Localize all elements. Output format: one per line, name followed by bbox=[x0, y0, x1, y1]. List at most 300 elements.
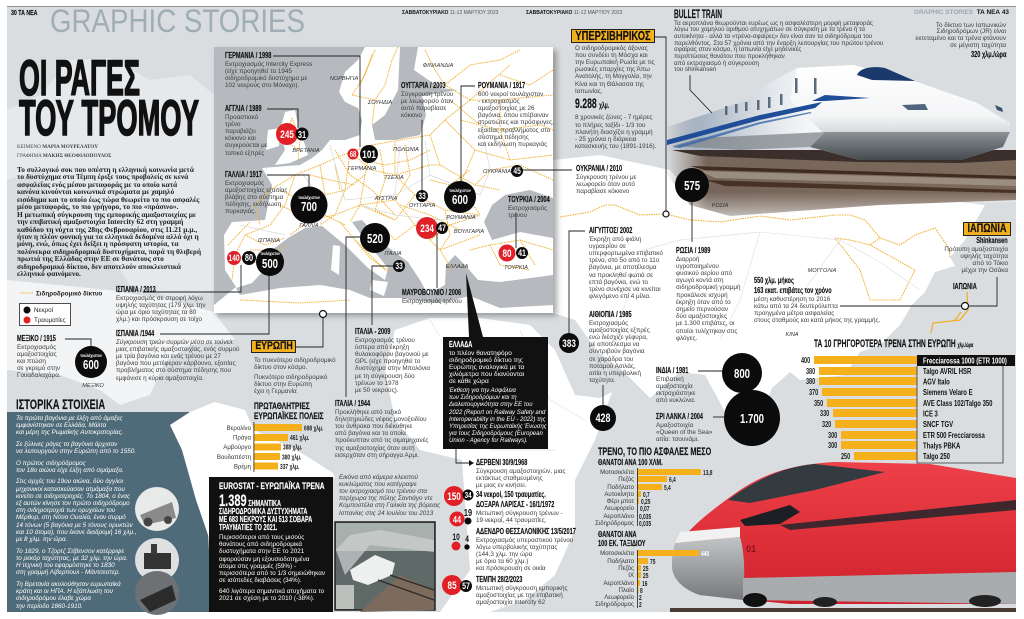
text: Άδενδρο Θεσσαλονίκης bbox=[476, 527, 576, 572]
text: history: Ο πρώτος σιδηρόδρομος bbox=[16, 460, 86, 467]
main title: ΟΙ ΡΑΓΕΣ bbox=[19, 50, 140, 106]
intro paragraph: σιδηροδρομικό δίκτυο, δεν αποτελούν αποκλειστικά bbox=[17, 262, 181, 271]
text: Μαυροβούνιο 2006: Εκτροχιασμός τρένου bbox=[402, 298, 462, 304]
casualty circles: 101 bbox=[362, 149, 376, 161]
text: Ουγγαρία 2003: με λεωφορείο όταν bbox=[401, 98, 453, 105]
bar chart: european cities: Βερολίνο bbox=[227, 425, 252, 432]
text: JR network: Σιδηροδρόμων (JR) είναι bbox=[937, 28, 1006, 35]
text: history: στη σιδηροτροχιά των ορυχείων του bbox=[16, 507, 115, 514]
text: Bullet train: Τα αεροπλάνα θεωρούνται ευρέως ως η ασφαλέστερη μορφή μεταφοράς bbox=[674, 20, 873, 26]
text: history bbox=[16, 414, 137, 610]
intro paragraph bbox=[17, 165, 201, 278]
text: Ισπανία 2013: χλμ.) και πρόσκρουση σε τοίχο bbox=[116, 316, 202, 323]
text: Ιταλία 2009 bbox=[355, 327, 430, 394]
bar chart: deaths per 100 km: Αυτοκίνητο bbox=[604, 491, 635, 498]
europe map country names: ΠΟΛΩΝΙΑ bbox=[393, 147, 419, 153]
text: Αιθιοπία 1985: ενώ διέσχιζε γέφυρα, bbox=[589, 334, 648, 341]
text: Γαλλία 1917: Εκτροχιασμός bbox=[225, 180, 264, 186]
text: history: Το 1829, ο Τζορτζ Στίβενσον κατέρριψε bbox=[16, 548, 124, 555]
masthead: graphic stories: GRAPHIC STORIES bbox=[50, 3, 305, 39]
legend: Τραυματίες bbox=[34, 316, 66, 324]
text: Μαυροβούνιο 2006: ΜΑΥΡΟΒΟΥΝΙΟ / 2006 bbox=[402, 288, 461, 297]
photo: red frecciarossa train bbox=[670, 462, 1016, 612]
text: Ρωσία 1989: Διαρροή bbox=[676, 256, 699, 262]
text: Αιθιοπία 1985 bbox=[589, 310, 650, 384]
ring markers bbox=[320, 211, 968, 318]
text: Ρουμανία 1917: - εκτροχιασμός bbox=[478, 98, 520, 105]
text: Ρωσία 1989: οποίοι τυλίχτηκαν στις bbox=[676, 328, 737, 335]
text: Ρουμανία 1917: αμαξοστοιχίας με 26 bbox=[478, 105, 535, 112]
byline: ΓΡΑΦΗΜΑ ΜΑΚΗΣ ΘΕΟΦΙΛΟΠΟΥΛΟΣ bbox=[17, 153, 111, 159]
text: Υπερσιβηρικός: που συνδέει τη Μόσχα και bbox=[575, 52, 648, 59]
europe map country names: ΑΥΣΤΡΙΑ bbox=[374, 196, 398, 202]
text: Ουκρανία 2010: ΟΥΚΡΑΝΙΑ / 2010 bbox=[576, 164, 622, 173]
text: JR network: σε μέγιστη ταχύτητα bbox=[950, 42, 1006, 49]
masthead date centre right: ΣΑΒΒΑΤΟΚΥΡΙΑΚΟ 11-12 ΜΑΡΤΙΟΥ 2023 bbox=[526, 10, 622, 16]
text: history: κράτη και οι ΗΠΑ. Η εξάπλωση του bbox=[16, 588, 113, 595]
text: Ισπανία 2013: Εκτροχιασμός σε στροφή λόγω bbox=[116, 294, 203, 302]
text: eurostat panel: EUROSTAT - ΕΥΡΩΠΑΪΚΑ ΤΡΕΝΑ bbox=[219, 481, 325, 492]
text: Αίγυπτος 2002: φλεγόμενο επί 4 μίλια. bbox=[589, 293, 651, 300]
masthead date centre left: ΣΑΒΒΑΤΟΚΥΡΙΑΚΟ 11-12 ΜΑΡΤΙΟΥ 2023 bbox=[402, 10, 498, 16]
text: greece panel: Interoperability in the EU - 2022) της bbox=[449, 417, 546, 423]
text: Υπερσιβηρικός: το πλήρες ταξίδι - 1/3 του bbox=[575, 122, 645, 129]
text: eurostat panel: 640 λιγότερα σημαντικά ατυχήματα το bbox=[219, 588, 324, 595]
text: Μαυροβούνιο 2006 bbox=[402, 288, 462, 304]
text: eurostat panel: δυστυχήματα στην ΕΕ το 2021 bbox=[219, 548, 304, 555]
text: history: Η τεχνική του εφαρμόστηκε το 1830 bbox=[16, 562, 115, 569]
world map labels bbox=[82, 203, 837, 389]
casualty circles bbox=[75, 123, 780, 595]
panel: europe map bbox=[214, 47, 553, 313]
land: africa bbox=[385, 318, 612, 612]
text: Ουκρανία 2010 bbox=[576, 164, 636, 195]
text: Άδενδρο Θεσσαλονίκης: λόγω υπερβολικής ταχύτητας bbox=[476, 544, 557, 551]
text: history: εξ αυτών κίνησε τον πρώτο σιδηρόδρομο bbox=[16, 500, 130, 507]
africa borders bbox=[430, 320, 585, 610]
text: Γαλλία 1917 bbox=[225, 170, 288, 215]
legend bbox=[20, 290, 103, 326]
text: greece panel: για τους Σιδηροδρόμους (European bbox=[449, 431, 543, 437]
text: Τέμπη: αμαξοστοιχία Intercity 62 bbox=[476, 599, 545, 606]
bar chart: deaths per 100m journeys: Αεροπλάνο bbox=[603, 580, 635, 587]
text: Δοξαρά Λάρισας: Μετωπική σύγκρουση τρένων - bbox=[476, 510, 563, 516]
eurostat black panel bbox=[209, 477, 333, 612]
text: history: και μέρη της Ρωμαϊκής Αυτοκρατορίας. bbox=[16, 429, 123, 436]
text: eurostat panel: περισσότερα από το 1/3 σημειώθηκαν bbox=[219, 570, 325, 577]
text: Σρι Λάνκα 2004: ΣΡΙ ΛΑΝΚΑ / 2004 bbox=[656, 412, 703, 421]
text: eurostat panel: άτομα στις γραμμές (59%) - bbox=[219, 563, 296, 570]
text: JR network bbox=[916, 22, 1006, 59]
text: Ουκρανία 2010: παραβίασε κόκκινο bbox=[576, 188, 629, 195]
text: Ρουμανία 1917: σύστημα πέδησης bbox=[478, 134, 529, 141]
casualty circles: 47 bbox=[438, 222, 446, 233]
photo caption bbox=[339, 474, 440, 517]
europe map country names: ΤΟΥΡΚΙΑ bbox=[504, 265, 528, 271]
bar chart: deaths per 100m journeys: 16 bbox=[642, 580, 648, 588]
casualty circles: 150 bbox=[447, 491, 461, 503]
bar chart: deaths per 100m journeys: Πλοίο bbox=[618, 587, 635, 594]
casualty circles: 520 bbox=[367, 233, 383, 246]
intro paragraph: καθόδου τη νύχτα της 28ης Φεβρουαρίου, στις 11.21 μ.μ., bbox=[17, 224, 197, 234]
heading: european cities bbox=[254, 401, 324, 422]
text: history: με 8 χλμ. την ώρα. bbox=[16, 536, 67, 543]
text: Αιθιοπία 1985: αμαξοστοιχίας εξπρές bbox=[589, 327, 650, 334]
text: greece panel: Union - Agency for Railways). bbox=[449, 438, 528, 444]
text: JR network: Το δίκτυο των Ιαπωνικών bbox=[936, 22, 1006, 28]
intro paragraph: μόνη, ενώ, όπως έχει δείξει η πρόσφατη ιστορία, τα bbox=[17, 239, 178, 248]
main title: ΤΟΥ ΤΡΟΜΟΥ bbox=[19, 90, 199, 146]
text: Ρωσία 1989: σημείο περνούσαν bbox=[676, 306, 728, 313]
text: Αίγυπτος 2002: να προκληθεί φωτιά σε bbox=[589, 272, 653, 279]
bar chart: deaths per 100m journeys bbox=[595, 550, 709, 609]
bar chart: deaths per 100 km: Λεωφορείο bbox=[604, 505, 635, 512]
european rail network bbox=[228, 47, 553, 303]
text: Ισπανία 1944: βαγόνια που μετέφεραν κάρβουνο, εξαιτίας bbox=[116, 360, 236, 367]
europe map country names: ΒΡΕΤΑΝΙΑ bbox=[292, 148, 320, 154]
casualty circles: 68 bbox=[350, 151, 356, 159]
casualty circles: 33 bbox=[418, 191, 426, 201]
casualty circles: 428 bbox=[596, 412, 611, 425]
bar chart: fastest trains in europe: AVE Class 102/Talgo 350 bbox=[923, 398, 992, 408]
text: Ρωσία 1989: αγωγό κοντά στη bbox=[676, 277, 724, 284]
text: Ιταλία 1944: της αμαξοστοιχίας όταν αυτή bbox=[335, 445, 415, 452]
bar chart: fastest trains in europe: 400 bbox=[801, 356, 810, 365]
text: Αίγυπτος 2002: επτά βαγόνια, ενώ το bbox=[589, 279, 648, 286]
bar chart: fastest trains in europe: ETR 500 Frecciarossa bbox=[923, 430, 986, 440]
text: Ρουμανία 1917: ΡΟΥΜΑΝΙΑ / 1917 bbox=[478, 81, 525, 90]
text: Ρουμανία 1917: 600 νεκροί τουλάχιστον bbox=[478, 90, 543, 98]
text: Μεξικό 1915: ΜΕΞΙΚΟ / 1915 bbox=[17, 334, 56, 343]
text: Σρι Λάνκα 2004: αιτία: τσουνάμι. bbox=[656, 436, 699, 443]
text: Ιταλία 1944: Προκλήθηκε από τοξικό bbox=[335, 408, 401, 416]
legend: Σιδηροδρομικό δίκτυο bbox=[36, 290, 103, 298]
text: Αγγλία 1989: τρένο bbox=[225, 121, 241, 128]
text: Δερβένι bbox=[476, 458, 566, 499]
intro paragraph: εισόδημα και το οποίο έως τώρα θεωρείτο το πιο ασφαλές bbox=[17, 195, 199, 204]
text: Υπερσιβηρικός: πλανήτη διασχίζει η γραμμή bbox=[575, 129, 653, 136]
text: history: τον 18ο αιώνα είχε έλξη από σιμάμαξα. bbox=[16, 467, 124, 474]
label box: Ευρώπη: ΕΥΡΩΠΗ bbox=[255, 340, 292, 352]
text: Ρωσία 1989: προκάλεσε ισχυρή bbox=[676, 292, 728, 299]
casualty circles: 80 bbox=[245, 252, 253, 263]
label box: Υπερσιβηρικός: ΥΠΕΡΣΙΒΗΡΙΚΟΣ bbox=[575, 28, 651, 43]
casualty circles: τουλάχιστον bbox=[80, 352, 102, 358]
text: greece panel: των Σιδηροδρόμων και τη bbox=[449, 395, 517, 401]
connector lines bbox=[65, 37, 997, 463]
text: Υπερσιβηρικός bbox=[575, 44, 656, 150]
text: eurostat panel: 1.389 ΣΗΜΑΝΤΙΚΑ bbox=[219, 491, 281, 510]
text: Ευρώπη: έχει η Γερμανία bbox=[254, 388, 297, 395]
heading: fastest trains: ΤΑ 10 ΓΡΗΓΟΡΟΤΕΡΑ ΤΡΕΝΑ ΣΤΗΝ ΕΥΡΩΠΗ χλμ./ώρα bbox=[814, 338, 973, 350]
text: Αίγυπτος 2002: τρένο συνέχισε να κινείται bbox=[589, 286, 661, 293]
text: Ισπανία 2013: υψηλής ταχύτητας (179 χλμ. την bbox=[116, 302, 206, 309]
text: Ρωσία 1989 bbox=[676, 246, 741, 342]
text: Αγγλία 1989: κόκκινο και bbox=[225, 135, 256, 142]
text: Ισπανία 1944: Σύγκρουση τριών συρμών μέσα σε τούνελ: bbox=[116, 338, 234, 346]
bar chart: fastest trains in europe: 380 bbox=[806, 377, 815, 386]
bar chart: fastest trains in europe: 330 bbox=[820, 409, 829, 418]
text: history: να λειτουργούν στην Ευρώπη από το 1550. bbox=[16, 448, 136, 455]
text: Τουρκία 2004: τρένου bbox=[508, 212, 527, 219]
greece black panel with pointer bbox=[443, 273, 548, 449]
text: Ευρώπη: Πυκνότερο σιδηροδρομικό bbox=[254, 374, 327, 381]
bar chart: deaths per 100 km: 13,8 bbox=[703, 469, 713, 477]
casualty circles: 10 bbox=[452, 532, 460, 542]
text: Ρουμανία 1917: εξαιτίας προβλήματος στο bbox=[478, 127, 550, 134]
europe map country names: ΟΥΚΡΑΝΙΑ bbox=[483, 169, 511, 175]
text: Ρωσία 1989: δύο αμαξοστοιχίες bbox=[676, 313, 727, 320]
europe map country names bbox=[258, 63, 528, 271]
intro paragraph: ήταν η πλέον φονική για τα ελληνικά δεδομένα αλλά όχι η bbox=[17, 232, 199, 241]
casualty circles: 31 bbox=[298, 129, 306, 140]
label box: Ιαπωνία: ΙΑΠΩΝΙΑ bbox=[967, 223, 1007, 235]
text: Αιθιοπία 1985: Εκτροχιασμός bbox=[589, 320, 628, 326]
text: Δερβένι: ΔΕΡΒΕΝΙ 30/9/1968 bbox=[476, 458, 527, 467]
text: Ινδία 1981: αμαξοστοιχία bbox=[656, 383, 693, 390]
text: history: 14 τόνων (5 βαγόνια με 5 τόνους ορυκτών bbox=[16, 522, 133, 529]
text: Shinkansen: μέχρι την Οσάκα bbox=[962, 267, 1008, 274]
bar chart: european cities: 461 χλμ. bbox=[290, 433, 309, 442]
text: Bullet train: αυτοκίνητα - αλλά τα «τρένα-σφαίρες» δεν είναι σαν τα σιδηρόδρομα του bbox=[674, 33, 872, 40]
label box: Ιαπωνία bbox=[963, 222, 1011, 236]
text: Bullet train: λόγω του χαμηλού αριθμού ατυχημάτων σε σύγκριση με τα τρένα ή τα bbox=[674, 26, 865, 33]
text: Ουγγαρία 2003: αυτό παραβίασε bbox=[401, 105, 446, 112]
text: Ισπανία 1944: προβλήματος στο σύστημα πέδησης που bbox=[116, 367, 231, 374]
intro paragraph: Η μετωπική σύγκρουση της εμπορικής αμαξοστοιχίας με bbox=[17, 210, 196, 219]
text: Bullet train: του shinkansen bbox=[674, 66, 716, 73]
europe map country names: ΤΣΕΧΙΑ bbox=[384, 175, 404, 181]
text: Υπερσιβηρικός: ρωσικές επαρχίες της Άπω bbox=[575, 66, 650, 73]
text: Ευρώπη: Το πυκνότερο σιδηροδρομικό bbox=[254, 356, 336, 364]
casualty circles: 234 bbox=[420, 223, 434, 235]
text: Ρωσία 1989: υγροποιημένου bbox=[676, 263, 719, 270]
text: shinkansen statistics bbox=[754, 276, 880, 324]
text: Μεξικό 1915 bbox=[17, 334, 61, 379]
text: eurostat panel: αφορούσαν μη εξουσιοδοτημένα bbox=[219, 556, 309, 563]
text: Υπερσιβηρικός: Ιαπωνίας. 8 χρονικές ζώνες - 7 ημέρες bbox=[575, 88, 652, 121]
bar chart: deaths per 100m journeys: 2 bbox=[639, 594, 642, 602]
casualty circles: 383 bbox=[562, 338, 576, 350]
europe map country names: ΦΙΝΛΑΝΔΙΑ bbox=[423, 63, 454, 69]
text: Shinkansen: από το Τόκιο bbox=[973, 260, 1008, 267]
text: Αίγυπτος 2002 bbox=[589, 226, 663, 300]
bar chart: fastest trains in europe: Siemens Velaro E bbox=[923, 387, 973, 397]
text: Ιταλία 1944: από βαγόνια και τα οποία bbox=[335, 430, 406, 437]
casualty circles: 140 bbox=[229, 253, 240, 263]
masthead left: 30 ΤΑ ΝΕΑ bbox=[11, 8, 37, 17]
casualty circles: 600 bbox=[452, 194, 468, 207]
text: Αιθιοπία 1985: αιτία η υπερβολική bbox=[589, 370, 641, 377]
text: Ουγγαρία 2003: κόκκινο bbox=[401, 112, 422, 119]
text: Ισπανία 1944 bbox=[116, 329, 240, 382]
text: JR network: 320 χλμ./ώρα bbox=[971, 50, 1006, 59]
text: history: σιδηροδρόμου έλαβε χώρα bbox=[16, 595, 91, 602]
text: Μεξικό 1915: σε γκρεμό στην bbox=[17, 365, 60, 372]
bar chart: deaths per 100 km: 0,25 bbox=[641, 498, 651, 506]
text: Αίγυπτος 2002: υπερφορτωμένα επιβατικό bbox=[589, 250, 663, 257]
world map labels: ΡΩΣΙΑ bbox=[712, 203, 729, 209]
text: Αιθιοπία 1985: ταχύτητα. bbox=[589, 377, 616, 384]
text: greece panel: 2022 (Report on Railway Safety and bbox=[449, 410, 545, 416]
legend: Νεκροί bbox=[34, 306, 54, 314]
text: Γαλλία 1917: πυρκαγιάς. bbox=[225, 208, 256, 215]
casualty circles: τουλάχιστον bbox=[260, 250, 281, 256]
intro paragraph: ελληνικό φαινόμενο. bbox=[17, 269, 81, 278]
text: Γερμανία 1998: Εκτροχιασμός Intercity Express bbox=[225, 60, 312, 68]
bar chart: fastest trains in europe: 320 bbox=[822, 420, 831, 429]
text: Γαλλία 1917: πέδησης, εκδήλωση bbox=[225, 201, 281, 208]
text: Δοξαρά Λάρισας: 19 νεκροί, 44 τραυματίες. bbox=[476, 517, 546, 524]
land: south america bbox=[155, 402, 335, 612]
text: Άδενδρο Θεσσαλονίκης: ΑΔΕΝΔΡΟ ΘΕΣΣΑΛΟΝΙΚΗΣ 13/5/2017 bbox=[476, 527, 576, 536]
text: Αίγυπτος 2002: Έκρηξη από φιάλη bbox=[589, 236, 641, 242]
bar chart: deaths per 100 km: 0,035 bbox=[639, 513, 652, 521]
photo caption: Κομποστέλα στη Γαλικία της βόρειας bbox=[339, 502, 440, 509]
text: history: στη γραμμή Λίβερπουλ - Μάντσεστερ. bbox=[16, 569, 120, 576]
text: Ιταλία 2009: Εκτροχιασμός τρένου bbox=[355, 336, 415, 344]
text: Τουρκία 2004: ΤΟΥΡΚΙΑ / 2004 bbox=[508, 195, 550, 204]
text: eurostat panel: ΣΙΔΗΡΟΔΡΟΜΙΚΑ ΔΥΣΤΥΧΗΜΑΤΑ bbox=[219, 506, 307, 516]
text: Ισπανία 2013: ΙΣΠΑΝΙΑ / 2013 bbox=[116, 285, 156, 294]
text: Υπερσιβηρικός: Ο σιδηροδρομικός άξονας bbox=[575, 44, 648, 52]
masthead right: GRAPHIC STORIES ΤΑ ΝΕΑ 43 bbox=[914, 9, 1009, 16]
text: shinkansen statistics: στους σταθμούς και κατά μήκος της γραμμής. bbox=[754, 317, 880, 324]
text: Άδενδρο Θεσσαλονίκης: (144,3 χλμ. την ώρα bbox=[476, 551, 532, 558]
casualty circles: τουλάχιστον bbox=[449, 187, 471, 193]
intro paragraph: την επιβατική αμαξοστοιχία Intercity 62 στη γραμμή bbox=[17, 217, 183, 226]
bar chart: deaths per 100m journeys: 8 bbox=[640, 587, 643, 595]
text: history: και 10 άτομα), που έκανε διαδρομή 16 χλμ., bbox=[16, 529, 137, 536]
text: Αίγυπτος 2002: βαγόνια, με αποτέλεσμα bbox=[589, 264, 656, 271]
bar chart: deaths per 100 km: 6,4 bbox=[669, 476, 676, 484]
text: greece panel: ΕΛΛΑΔΑ bbox=[449, 340, 472, 349]
photo: bullet train bbox=[665, 65, 1016, 218]
europe country borders bbox=[240, 120, 490, 235]
bar chart: european cities: 380 χλμ. bbox=[282, 452, 301, 462]
bar chart: deaths per 100m journeys: Μοτοσικλέτα bbox=[600, 550, 634, 557]
text: Bullet train bbox=[674, 7, 883, 73]
text: shinkansen statistics: 550 χλμ. μήκος bbox=[754, 276, 794, 285]
photo caption: κυκλώματος που κατέγραψε bbox=[339, 481, 417, 488]
text: shinkansen statistics: 163 εκατ. επιβάτες τον χρόνο bbox=[754, 286, 832, 295]
text: Ουκρανία 2010: Σύγκρουση τρένου με bbox=[576, 174, 636, 180]
text: Αίγυπτος 2002: υγραερίου σε bbox=[589, 243, 626, 250]
text: history: μηχανικοί κατασκεύασαν ατμάμαξα που bbox=[16, 486, 125, 493]
text: greece panel: Ευρώπης αναλογικά με τα bbox=[449, 364, 524, 371]
text: Ισπανία 2013 bbox=[116, 285, 206, 323]
heading: european cities: ΠΡΩΤΑΘΛΗΤΡΙΕΣ bbox=[254, 401, 310, 412]
text: Ισπανία 1944: με τρία βαγόνια και ενός τρένου με 27 bbox=[116, 353, 221, 360]
text: Αγγλία 1989: παραβιάζει bbox=[225, 128, 256, 135]
text: history: Μέρθυρ, στη Νότια Ουαλία, έναν συρμό bbox=[16, 514, 126, 521]
text: greece panel: σε κάθε χώρα bbox=[449, 378, 489, 385]
text: Ευρώπη: δίκτυο στην Ευρώπη bbox=[254, 381, 312, 388]
bar chart: deaths per 100 km: Μοτοσικλέτα bbox=[600, 469, 634, 476]
subheading: per 100 km: ΘΑΝΑΤΟΙ ΑΝΑ 100 ΧΛΜ. bbox=[598, 458, 663, 467]
text: eurostat panel: θανάτους από σιδηροδρομικά bbox=[219, 541, 302, 548]
text: Δερβένι: με μιας εν κινήσει. bbox=[476, 482, 526, 489]
photo: red frecciarossa train: 01 bbox=[746, 544, 756, 554]
text: Ιταλία 1944 bbox=[335, 399, 428, 459]
text: Γερμανία 1998: (είχε προηγηθεί το 1945 bbox=[225, 68, 292, 75]
bar chart: fastest trains in europe: SNCF TGV bbox=[923, 419, 953, 429]
text: Τέμπη: Μετωπική σύγκρουση εμπορικής bbox=[476, 584, 568, 592]
bar chart: fastest trains in europe bbox=[801, 355, 1015, 463]
bar chart: fastest trains in europe: 380 bbox=[806, 367, 815, 376]
text: Τέμπη bbox=[476, 575, 568, 606]
text: history: εμφανίστηκαν σε Ελλάδα, Μάλτα bbox=[16, 422, 106, 429]
heading: ιστορικά στοιχεία: ΙΣΤΟΡΙΚΑ ΣΤΟΙΧΕΙΑ bbox=[16, 396, 105, 412]
text: Ιταλία 2009: με τη σύγκρουση δύο bbox=[355, 373, 415, 380]
text: Ρουμανία 1917 bbox=[478, 81, 554, 148]
bar chart: fastest trains in europe: 370 bbox=[809, 388, 818, 397]
casualty circles: 800 bbox=[734, 368, 750, 381]
text: history: Στις αρχές του 19ου αιώνα, δύο άγγλοι bbox=[16, 478, 123, 485]
casualty circles: 19 bbox=[464, 507, 472, 518]
text: Ιταλία 1944: ΙΤΑΛΙΑ / 1944 bbox=[335, 399, 370, 408]
text: Τουρκία 2004: Εκτροχιασμός bbox=[508, 204, 547, 212]
text: Γαλλία 1917: αμαξοστοιχίας εξαιτίας bbox=[225, 187, 287, 194]
bar chart: fastest trains in europe: Talgo 250 bbox=[923, 451, 950, 461]
bar chart: deaths per 100 km: Ποδήλατο bbox=[607, 484, 635, 491]
text: Ρουμανία 1917: βαγόνια, όπου επέβαιναν bbox=[478, 112, 549, 119]
text: Ρουμανία 1917: στρατιώτες και πρόσφυγες, bbox=[478, 119, 554, 126]
casualty circles: 45 bbox=[513, 166, 521, 176]
bar chart: fastest trains in europe: Thalys PBKA bbox=[923, 440, 961, 451]
europe map country names: ΓΕΡΜΑΝΙΑ bbox=[348, 166, 376, 172]
text: Ινδία 1981 bbox=[656, 366, 696, 404]
photo caption: τον εκτροχιασμό του τρένου στα bbox=[339, 488, 427, 495]
bar chart: european cities bbox=[217, 422, 323, 472]
crash photo bbox=[335, 522, 435, 612]
text: Αίγυπτος 2002: ΑΙΓΥΠΤΟΣ/ 2002 bbox=[589, 226, 632, 235]
text: Ινδία 1981: ΙΝΔΙΑ / 1981 bbox=[656, 366, 688, 375]
europe map country names: ΙΣΠΑΝΙΑ bbox=[258, 238, 280, 244]
map panel shadow bbox=[217, 50, 557, 316]
text: Ιταλία 2009: τρένων το 1978 bbox=[355, 380, 398, 387]
bar chart: european cities: Αμβούργο bbox=[223, 444, 252, 451]
world map labels: ΜΟΓΓΟΛΙΑ bbox=[808, 268, 837, 274]
text: Αίγυπτος 2002: τρένο, στο 5ο από το 11ο bbox=[589, 257, 659, 264]
slate history panel background bbox=[7, 412, 213, 612]
bar chart: deaths per 100 km: 0,7 bbox=[643, 491, 650, 499]
text: shinkansen statistics: κάτω από τα 24 δευτερόλεπτα bbox=[754, 303, 838, 310]
text: history: Σε ξύλινες ράγες τα βαγόνια άρχισαν bbox=[16, 441, 117, 448]
intro paragraph: το δυστύχημα στα Τέμπη έριξε τους προβολείς σε κενά bbox=[17, 172, 188, 181]
text: Τέμπη: αμαξοστοιχίας με την επιβατική bbox=[476, 592, 563, 599]
text: Shinkansen: υψηλής ταχύτητα bbox=[960, 253, 1008, 260]
world map labels: ΚΙΝΑ bbox=[785, 332, 799, 338]
text: Bullet train: BULLET TRAIN bbox=[674, 7, 722, 21]
text: Ουκρανία 2010: λεωφορείο όταν αυτό bbox=[576, 181, 635, 188]
asia borders bbox=[600, 232, 920, 340]
text: Γερμανία 1998: σιδηροδρομικό δυστύχημα με bbox=[225, 75, 307, 82]
text: Άδενδρο Θεσσαλονίκης: και πρόσκρουση σε οικία bbox=[476, 565, 546, 572]
text: Δερβένι: Σύγκρουση αμαξοστοιχιών, μιας bbox=[476, 468, 566, 474]
casualty circles: 57 bbox=[462, 580, 470, 591]
text: Άδενδρο Θεσσαλονίκης: Εκτροχιασμός υπεραστικού τρένου bbox=[476, 536, 573, 544]
intro paragraph: πολύνεκρα σιδηροδρομικά δυστυχήματα, παρά τη θλιβερή bbox=[17, 247, 201, 256]
text: greece panel: Υπηρεσίας της Ευρωπαϊκής Ένωσης bbox=[449, 424, 547, 430]
text: Υπερσιβηρικός: Ανατολής, τη Μογγολία, την bbox=[575, 73, 652, 80]
casualty circles: 600 bbox=[83, 359, 99, 372]
casualty circles: 85 bbox=[448, 580, 457, 592]
text: eurostat panel: σε ισόπεδες διαβάσεις (34%). bbox=[219, 577, 302, 584]
text: Τουρκία 2004 bbox=[508, 195, 550, 219]
bar chart: deaths per 100m journeys: 25 bbox=[643, 572, 649, 580]
bar chart: deaths per 100m journeys: Λεωφορείο bbox=[604, 594, 635, 601]
